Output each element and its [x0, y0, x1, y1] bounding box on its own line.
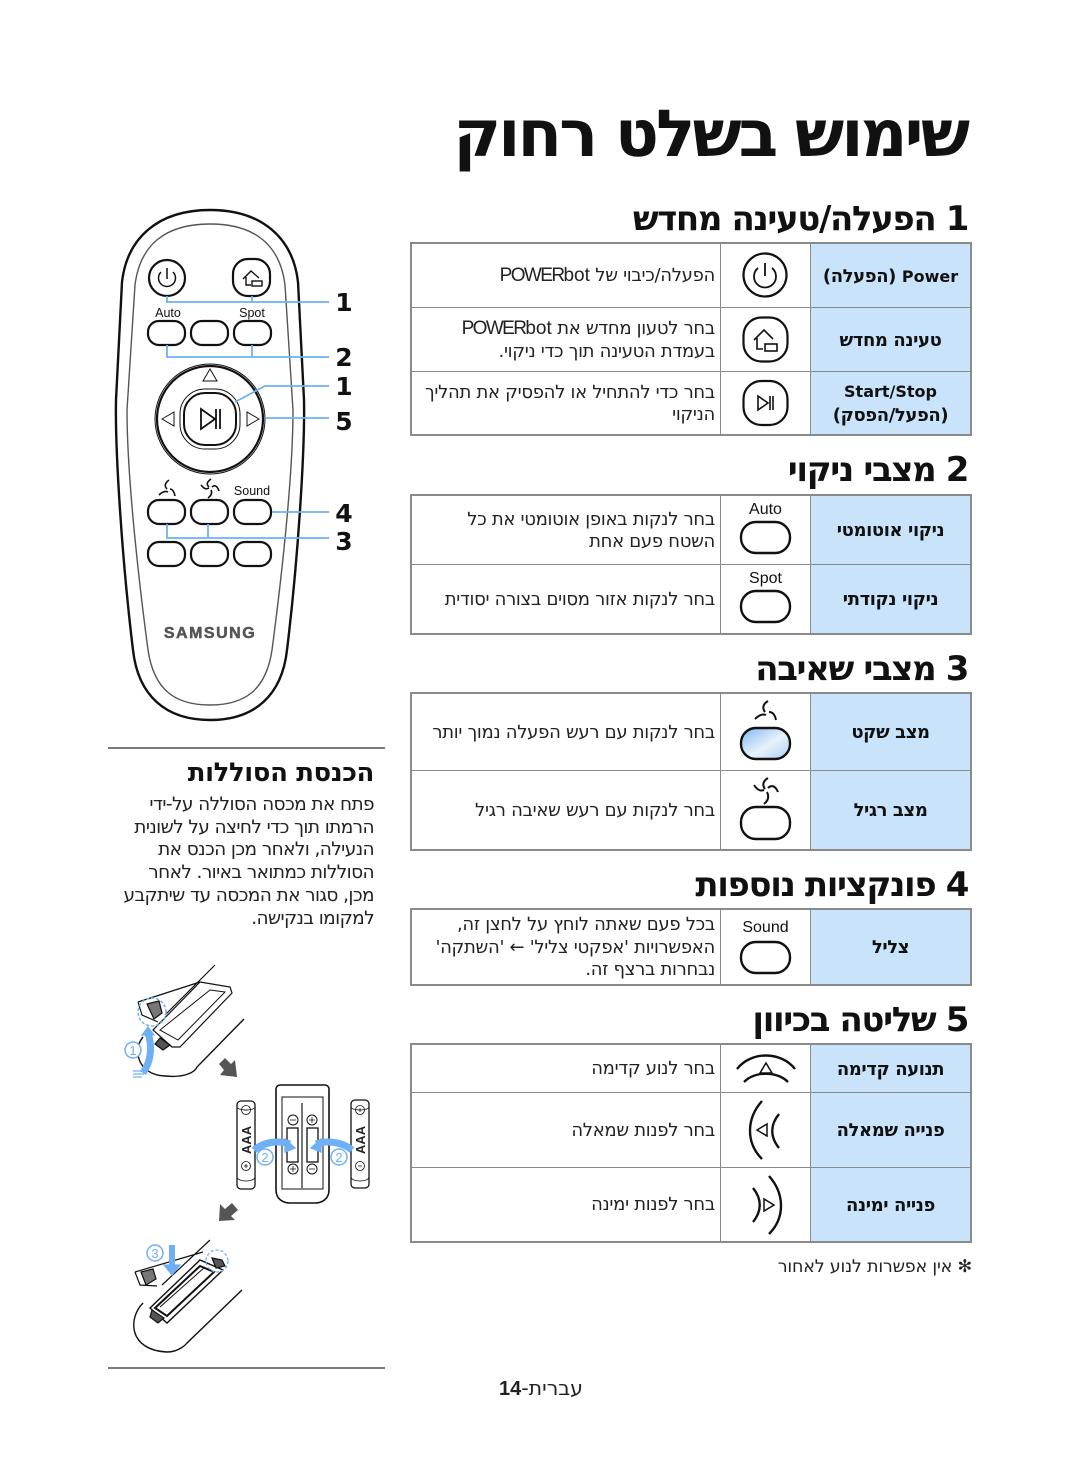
row: spot: ניקוי נקודתי: [843, 589, 938, 610]
text: battery instructions: הסוללות כמתואר באיור. לאחר: [148, 862, 374, 883]
row: auto: השטח פעם אחת: [589, 531, 715, 552]
icon: auto button: Auto: [749, 501, 782, 518]
row: right: [412, 1167, 970, 1241]
heading: section 3: 3 מצבי שאיבה: [755, 649, 968, 689]
step 2: batteries: AAA: [353, 1125, 368, 1154]
callout numbers: 4: [335, 499, 353, 528]
icon: spot button: Spot: [749, 570, 782, 587]
icon: start stop button: [720, 372, 811, 434]
row: normal: [412, 770, 970, 849]
table: cleaning modes: [410, 494, 972, 635]
row: power: הפעלה/כיבוי של POWERbot: [500, 265, 715, 286]
heading: section 4: 4 פונקציות נוספות: [695, 865, 968, 905]
icon: home button: [720, 308, 811, 371]
row: recharge: טעינה מחדש: [840, 330, 941, 350]
row: auto: בחר לנקות באופן אוטומטי את כל: [467, 508, 715, 530]
arrow: step 1 to step 2: [219, 1058, 237, 1077]
button labels: Sound: [234, 484, 270, 498]
row: recharge: בחר לטעון מחדש את POWERbot: [462, 318, 715, 339]
step 1: opening cover: [125, 965, 244, 1077]
samsung logo: SAMSUNG: [164, 625, 256, 642]
callout numbers: [335, 288, 353, 556]
icon: forward arrow: [720, 1045, 811, 1092]
row: sound: צליל: [872, 937, 909, 958]
row: sound: האפשרויות 'אפקטי צליל' ← 'השתקה': [435, 937, 715, 958]
button labels: Spot: [239, 306, 265, 320]
callout numbers: 3: [335, 527, 353, 556]
row: sound: [435, 910, 970, 984]
row: sound: נבחרות ברצף זה.: [585, 959, 715, 980]
row: left: פנייה שמאלה: [837, 1120, 944, 1141]
row: start stop: [412, 371, 970, 434]
icon: sound button: Sound: [742, 919, 789, 936]
text: battery instructions: למקומו בנקישה.: [251, 908, 374, 929]
table: power and charging: [410, 242, 972, 436]
battery illustrations: [124, 964, 370, 1353]
button labels: [155, 306, 270, 498]
callout numbers: 1: [335, 372, 353, 401]
row: spot: [412, 564, 970, 633]
callout numbers: 2: [335, 343, 353, 372]
row: quiet: בחר לנקות עם רעש הפעלה נמוך יותר: [432, 722, 715, 743]
row: auto: [467, 496, 970, 564]
row: power: [500, 244, 970, 307]
row: power: Power (הפעלה): [823, 266, 958, 286]
row: left: [412, 1092, 970, 1167]
heading: section 1: 1 הפעלה/טעינה מחדש: [633, 199, 968, 239]
remote control diagram: [114, 208, 353, 722]
remote body: [116, 210, 304, 720]
row: right: פנייה ימינה: [846, 1194, 935, 1216]
heading: section 2: 2 מצבי ניקוי: [788, 450, 968, 490]
row: start stop: Start/Stop: [844, 382, 937, 401]
row: start stop: (הפעל/הפסק): [833, 405, 948, 426]
title: שימוש בשלט רחוק: [453, 97, 967, 172]
arrow: step 2 to step 3: [219, 1203, 238, 1221]
icon: quiet fan button: [720, 694, 811, 770]
page number: עברית-14: [499, 1376, 583, 1400]
icon: left arrow: [720, 1093, 811, 1167]
table: suction modes: [410, 692, 972, 851]
row: recharge: [412, 307, 970, 371]
row: normal: מצב רגיל: [854, 800, 927, 821]
text: battery instructions: מכן, סגור את המכסה עד שיתקבע: [123, 885, 374, 906]
button labels: Auto: [155, 306, 181, 320]
callout numbers: 1: [335, 288, 353, 317]
step 2: batteries: 2: [335, 1150, 343, 1165]
icon: auto button: [720, 496, 811, 564]
row: forward: [591, 1045, 970, 1092]
step 2: batteries: AAA: [239, 1125, 254, 1154]
icon: normal fan button: [720, 771, 811, 849]
text: battery instructions: [123, 794, 374, 929]
heading: section 5: 5 שליטה בכיוון: [752, 1000, 968, 1040]
top buttons: [149, 259, 270, 296]
table: additional functions: [410, 908, 972, 986]
callout numbers: 5: [335, 407, 353, 436]
text: battery instructions: הרמתו תוך כדי לחיצה על לשונית: [134, 817, 374, 838]
step 2: batteries: [237, 1085, 369, 1203]
step 3: closing cover: 3: [151, 1246, 159, 1261]
button rows: [148, 321, 271, 566]
callout lines: [167, 296, 329, 538]
row: right: בחר לפנות ימינה: [591, 1194, 715, 1215]
table: direction control: [410, 1043, 972, 1243]
text: battery instructions: פתח את מכסה הסוללה על-ידי: [149, 794, 374, 815]
row: left: בחר לפנות שמאלה: [571, 1120, 715, 1141]
divider: left bottom: [108, 1367, 385, 1369]
row: forward: תנועה קדימה: [837, 1058, 944, 1080]
row: quiet: מצב שקט: [851, 722, 930, 743]
icon: power button: [720, 244, 811, 307]
icon: sound button: [720, 910, 811, 984]
footnote: ✻ אין אפשרות לנוע לאחור: [778, 1257, 972, 1277]
row: start stop: הניקוי: [672, 404, 715, 425]
text: battery instructions: הנעילה, ולאחר מכן הכנס את: [158, 839, 374, 860]
row: forward: בחר לנוע קדימה: [591, 1058, 715, 1079]
step 1: opening cover: 1: [129, 1043, 137, 1058]
row: sound: בכל פעם שאתה לוחץ על לחצן זה,: [457, 914, 715, 935]
row: start stop: בחר כדי להתחיל או להפסיק את תהליך: [425, 382, 715, 402]
fan icons: [159, 479, 219, 498]
row: spot: בחר לנקות אזור מסוים בצורה יסודית: [445, 589, 715, 610]
row: quiet: [432, 694, 970, 770]
divider: left top: [108, 747, 385, 749]
row: normal: בחר לנקות עם רעש שאיבה רגיל: [475, 800, 715, 821]
direction wheel: [155, 364, 265, 474]
row: recharge: בעמדת הטעינה תוך כדי ניקוי.: [499, 340, 715, 362]
row: auto: ניקוי אוטומטי: [837, 520, 944, 541]
icon: right arrow: [720, 1168, 811, 1241]
step 2: batteries: 2: [261, 1150, 269, 1165]
heading: battery insertion: הכנסת הסוללות: [188, 758, 374, 788]
icon: spot button: [720, 565, 811, 633]
step 3: closing cover: [134, 1240, 242, 1352]
